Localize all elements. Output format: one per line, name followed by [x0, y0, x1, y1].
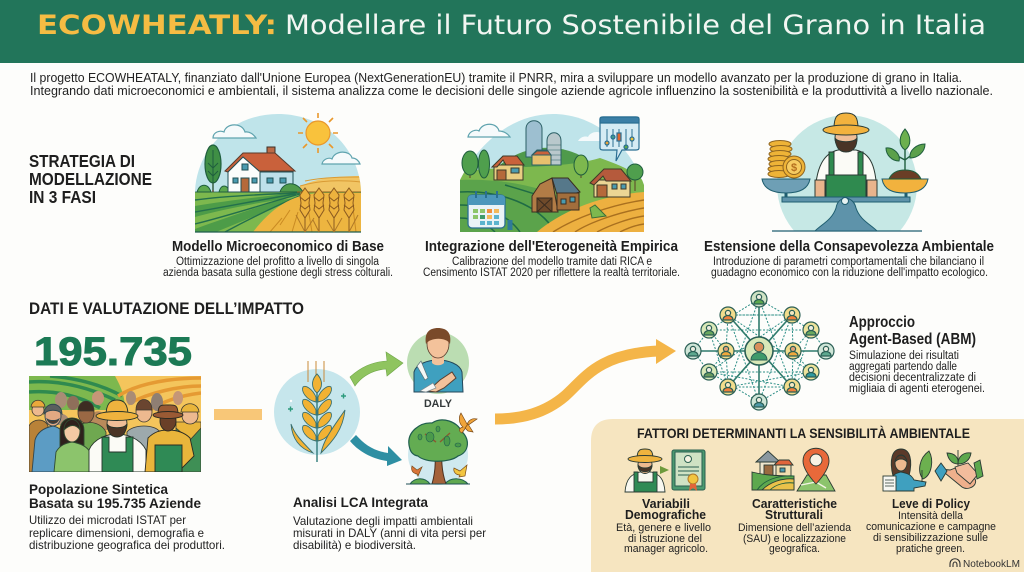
- cloud: [213, 125, 256, 138]
- panel description: Censimento ISTAT 2020 per riflettere la realtà territoriale.: [423, 267, 680, 279]
- panel: fattori determinanti: [591, 419, 1024, 572]
- farmer: main straw hat: [89, 400, 146, 472]
- block description: aggregati partendo dalle: [849, 361, 957, 373]
- column description: Dimensione dell’azienda: [738, 522, 852, 534]
- icon: tree and butterflies: [406, 413, 477, 485]
- connector bar: [214, 409, 262, 420]
- panel title: Integrazione dell'Eterogeneità Empirica: [425, 239, 679, 255]
- panel description: [423, 256, 680, 279]
- block title: Approccio: [849, 314, 915, 331]
- back row figures: [52, 391, 183, 430]
- icon: farmer and diploma: [625, 449, 705, 492]
- panel: fase 3: [704, 113, 994, 279]
- illustration: farmer balance: [761, 112, 929, 232]
- column: caratteristiche strutturali: [738, 448, 852, 555]
- header banner: [0, 0, 1024, 63]
- icon: wheat circle: [274, 361, 360, 462]
- column description: geografica.: [769, 543, 820, 555]
- arrow: to biodiversity: [350, 435, 402, 466]
- intro text: [30, 70, 993, 98]
- farmer: blue shirt: [32, 404, 66, 472]
- settings bubble: [600, 117, 639, 161]
- column title: Variabili: [642, 497, 690, 511]
- title: ECOWHEATLY:: [37, 10, 277, 41]
- block description: [293, 514, 486, 552]
- farmer: yellow helmet: [176, 404, 201, 472]
- big number: 195.735: [34, 330, 192, 374]
- panel description: Introduzione di parametri comportamentali che bilanciano il: [713, 256, 984, 268]
- barn: [532, 178, 580, 212]
- heading: strategia: IN 3 FASI: [29, 187, 96, 207]
- tree: [197, 145, 230, 192]
- panel description: [163, 256, 393, 279]
- arrow: to ABM: [495, 339, 676, 419]
- farmer: woman: [54, 418, 90, 472]
- block description: misurati in DALY (anni di vita persi per: [293, 526, 486, 540]
- heading: dati e valutazione: DATI E VALUTAZIONE DELL’IMPATTO: [29, 299, 304, 318]
- seedling: [886, 129, 925, 179]
- text: analisi LCA: [293, 494, 486, 552]
- column title: [625, 497, 706, 522]
- column description: [738, 522, 852, 555]
- intro text: Integrando dati microeconomici e ambientali, il sistema analizza come le decisioni delle singole aziende agricole influenzino la sostenibilità e la produttività a livello nazionale.: [30, 83, 993, 98]
- panel title: Modello Microeconomico di Base: [172, 239, 384, 255]
- network diagram: [685, 291, 834, 410]
- icon: farm and map pin: [752, 448, 835, 491]
- block description: [29, 513, 225, 552]
- farmer: grey overalls: [126, 399, 160, 450]
- farmhouse: [225, 147, 303, 192]
- block description: Utilizzo dei microdati ISTAT per: [29, 513, 186, 527]
- block description: disabilità) e biodiversità.: [293, 538, 416, 552]
- panel heading: FATTORI DETERMINANTI LA SENSIBILITÀ AMBIENTALE: [637, 426, 970, 441]
- panel title: Estensione della Consapevolezza Ambientale: [704, 239, 994, 255]
- calendar: [468, 191, 505, 228]
- illustration: farmer crowd: [29, 376, 201, 472]
- farmer: hard hat left: [29, 400, 48, 472]
- column title: [752, 497, 837, 522]
- column: leve di policy: [866, 449, 996, 555]
- trees: [462, 150, 643, 191]
- sun: [298, 113, 338, 153]
- intro text: Il progetto ECOWHEATALY, finanziato dall'Unione Europea (NextGenerationEU) tramite il PNRR, mira a sviluppare un modello avanzato per la produzione di grano in Italia.: [30, 70, 962, 85]
- illustration: farms landscape: [460, 114, 644, 232]
- column description: (SAU) e localizzazione: [743, 533, 846, 545]
- block title: Basata su 195.735 Aziende: [29, 495, 201, 511]
- column title: Leve di Policy: [892, 497, 970, 511]
- column description: comunicazione e campagne: [866, 521, 996, 533]
- illustration: farmer balance: $: [791, 162, 797, 174]
- cloud: [468, 124, 510, 137]
- block title: [849, 314, 976, 348]
- column title: Demografiche: [625, 508, 706, 522]
- heading: strategia: MODELLAZIONE: [29, 169, 152, 189]
- block description: [849, 350, 985, 395]
- panel: fase 2: [423, 110, 680, 279]
- illustration: farm and wheat: [195, 113, 361, 233]
- balance: [762, 179, 928, 231]
- block description: migliaia di agenti eterogenei.: [849, 383, 985, 395]
- agents: [685, 291, 834, 410]
- panel description: guadagno economico con la riduzione dell'impatto ecologico.: [711, 267, 988, 279]
- column description: di sensibilizzazione sulle: [873, 532, 988, 544]
- column description: Intensità della: [898, 510, 964, 522]
- farmhouse left: [492, 156, 524, 180]
- heading: strategia: STRATEGIA DI: [29, 151, 135, 171]
- column description: pratiche green.: [896, 543, 965, 555]
- farmhouse right: [590, 169, 631, 197]
- panel description: Ottimizzazione del profitto a livello di singola: [176, 256, 380, 268]
- block title: Agent-Based (ABM): [849, 331, 976, 348]
- column: variabili demografiche: [616, 449, 711, 555]
- block description: decisioni decentralizzate di: [849, 372, 976, 384]
- column description: di Istruzione del: [628, 533, 702, 545]
- coins: [768, 140, 805, 178]
- column title: Strutturali: [765, 508, 823, 522]
- center agent: [745, 337, 773, 365]
- block description: Simulazione dei risultati: [849, 350, 959, 362]
- icon: woman and handshake: [883, 449, 983, 491]
- title: [37, 10, 986, 41]
- panel description: azienda basata sulla gestione degli stress colturali.: [163, 267, 393, 279]
- column description: [866, 510, 996, 555]
- column title: Caratteristiche: [752, 497, 837, 511]
- farmer: [815, 113, 877, 202]
- butterflies: [412, 413, 477, 477]
- panel description: Calibrazione del modello tramite dati RICA e: [452, 256, 652, 268]
- column description: [616, 522, 711, 555]
- heading: strategia: [29, 151, 152, 207]
- panel: fase 1: [163, 110, 393, 279]
- block description: distribuzione geografica dei produttori.: [29, 538, 225, 552]
- arrow: to DALY: [350, 352, 403, 386]
- block title: Popolazione Sintetica: [29, 481, 168, 497]
- block title: Analisi LCA Integrata: [293, 494, 428, 510]
- farmer: bearded: [78, 400, 106, 450]
- block description: replicare dimensioni, demografia e: [29, 526, 204, 540]
- wheat ears: [296, 188, 361, 232]
- icon: DALY person: [407, 328, 469, 394]
- text: popolazione sintetica: [29, 481, 225, 552]
- column description: Età, genere e livello: [616, 522, 711, 534]
- panel description: [711, 256, 988, 279]
- title: Modellare il Futuro Sostenibile del Grano in Italia: [285, 10, 986, 41]
- notebooklm watermark: NotebookLM: [963, 558, 1020, 570]
- column description: manager agricolo.: [624, 543, 708, 555]
- block description: Valutazione degli impatti ambientali: [293, 514, 473, 528]
- block title: [29, 481, 201, 511]
- label: DALY: DALY: [424, 398, 453, 410]
- text: ABM: [849, 314, 985, 395]
- farmer: dark straw hat: [145, 405, 194, 472]
- silos: [526, 121, 561, 165]
